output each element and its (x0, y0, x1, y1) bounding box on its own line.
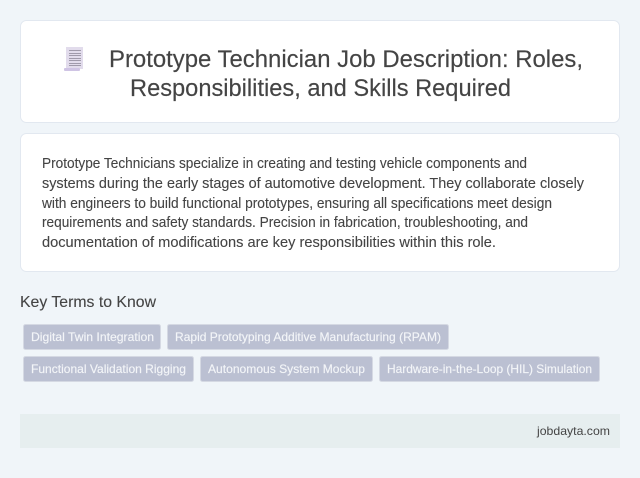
panel: title card (20, 20, 620, 122)
description text: requirements and safety standards. Precision in fabrication, troubleshooting, and (42, 215, 528, 231)
footer (20, 414, 620, 448)
footer: jobdayta.com (536, 424, 610, 438)
icon: document scroll (64, 47, 83, 71)
tag: digital twin integration (24, 324, 160, 350)
description text: systems during the early stages of automotive development. They collaborate closely (42, 176, 585, 192)
title (109, 46, 583, 102)
tag: hardware-in-the-loop: Hardware-in-the-Loop (HIL) Simulation (387, 362, 592, 376)
title: Responsibilities, and Skills Required (130, 75, 511, 102)
panel: description (20, 134, 620, 272)
tag: rapid prototyping (168, 324, 448, 350)
tag: digital twin integration: Digital Twin Integration (31, 330, 154, 344)
description text: documentation of modifications are key responsibilities within this role. (42, 235, 496, 251)
description text: Prototype Technicians specialize in creating and testing vehicle components and (42, 156, 527, 172)
panel: key term tags (24, 324, 600, 382)
heading: key terms: Key Terms to Know (20, 294, 156, 311)
tag: functional validation rigging (24, 356, 194, 382)
tag: rapid prototyping: Rapid Prototyping Additive Manufacturing (RPAM) (175, 330, 441, 344)
description text (41, 156, 585, 251)
description text: with engineers to build functional prototypes, ensuring all specifications meet design (41, 196, 552, 212)
tag: functional validation rigging: Functional Validation Rigging (31, 362, 186, 376)
tag: hardware-in-the-loop (380, 356, 600, 382)
title: Prototype Technician Job Description: Roles, (109, 46, 583, 73)
tag: autonomous system mockup: Autonomous System Mockup (208, 362, 365, 376)
tag: autonomous system mockup (200, 356, 372, 382)
